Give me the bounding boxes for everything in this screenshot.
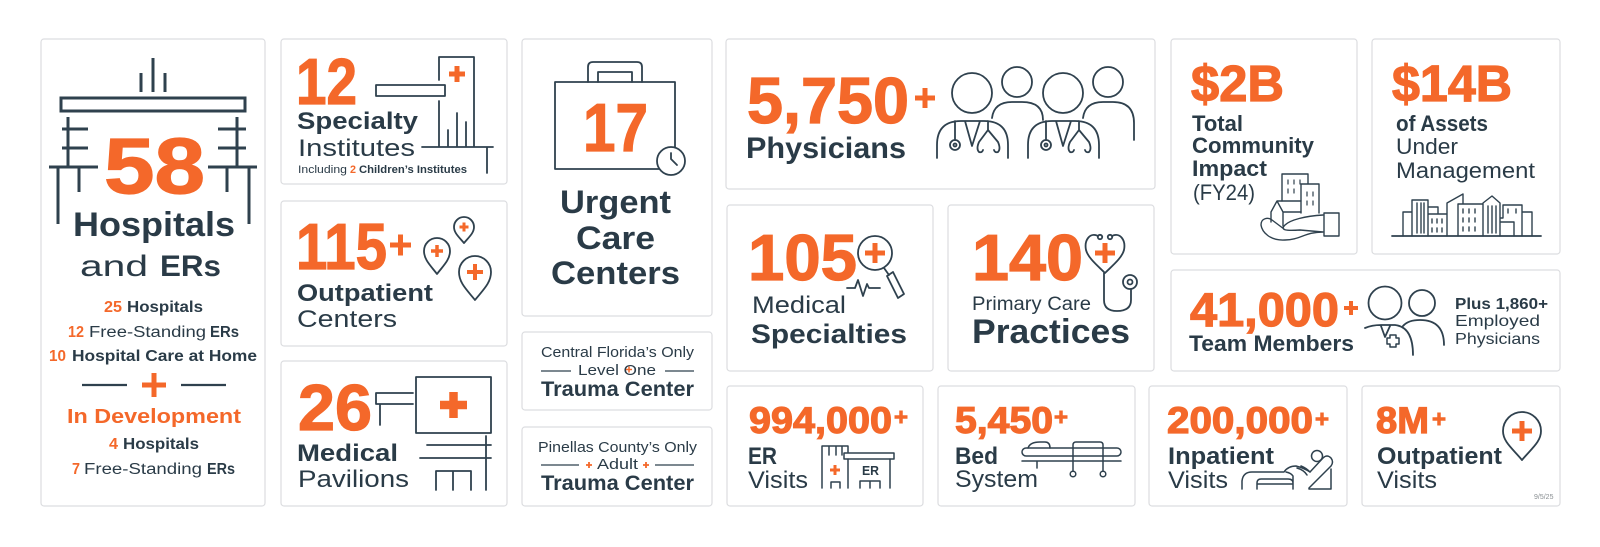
heading: and ERs: ERs <box>160 250 221 283</box>
label: care: Care <box>576 220 655 256</box>
icon: emergency room building: ER <box>862 463 880 478</box>
stat: 5,450+: 5,450 <box>955 400 1053 441</box>
label: team members: Team Members <box>1189 331 1354 356</box>
stat: 26: 26 <box>298 371 372 444</box>
text: 25 hospitals: 25 <box>104 299 122 316</box>
text: 7 free-standing ERs: 7 <box>72 461 80 478</box>
icon: institute building <box>376 57 493 173</box>
text: adult with rules: Adult <box>597 456 639 473</box>
text: including 2 children's institutes: 2 <box>350 164 356 176</box>
label: outpatient: Outpatient <box>297 280 433 307</box>
heading: in development: In Development <box>67 406 241 428</box>
panel: 41,000+ team members <box>1171 270 1560 371</box>
label: urgent: Urgent <box>560 184 671 220</box>
panel: 994,000+ ER visits <box>727 386 923 506</box>
label: outpatient: Outpatient <box>1377 443 1502 470</box>
text: plus 1,860+ employed physicians <box>1455 296 1548 348</box>
stat: 8M+: 8M <box>1376 400 1429 441</box>
stat: 58: 58 <box>104 121 205 210</box>
heading: and ERs: and <box>80 250 148 283</box>
label: under management: Under <box>1396 134 1458 159</box>
text: including 2 children's institutes: Children’s Institutes <box>359 164 467 176</box>
label: medical: Medical <box>752 292 846 319</box>
text: 12 free-standing ERs <box>68 324 239 341</box>
label: visits: Visits <box>1168 467 1228 494</box>
panel: 115+ outpatient centers <box>281 201 507 346</box>
text: central florida's only: Central Florida’s Only <box>541 344 695 361</box>
label: centers: Centers <box>297 306 397 333</box>
icon: emergency room building <box>822 446 894 488</box>
icon: briefcase with clock <box>555 62 685 175</box>
text: 4 hospitals: Hospitals <box>123 436 199 453</box>
panel: adult trauma center <box>522 427 712 506</box>
divider with plus <box>82 373 226 397</box>
panel: $2B community impact <box>1171 39 1357 254</box>
text: level one with rules <box>541 362 694 379</box>
label: system: System <box>955 466 1038 493</box>
text: plus 1,860+ employed physicians: Employed <box>1455 313 1540 330</box>
stat: 105: 105 <box>748 221 857 294</box>
panel: 140 primary care practices <box>948 205 1154 371</box>
stat: 5,750+: 5,750 <box>747 64 909 137</box>
panel: 105 medical specialties <box>727 205 933 371</box>
date stamp: 9/5/25 <box>1534 494 1554 501</box>
text: 7 free-standing ERs: Free-Standing <box>84 461 202 478</box>
text: 10 hospital care at home: 10 <box>49 348 66 365</box>
label: FY24: (FY24) <box>1193 180 1255 205</box>
panel: 5,450+ bed system <box>938 386 1135 506</box>
stat: 41,000+: 41,000 <box>1190 283 1339 336</box>
label: practices: Practices <box>972 313 1130 351</box>
panel: 17 urgent care centers <box>522 39 712 316</box>
text: 4 hospitals: 4 <box>109 436 118 453</box>
panel: 200,000+ inpatient visits <box>1149 386 1347 506</box>
stat: $14B: $14B <box>1392 55 1512 112</box>
icon: location pin <box>1503 412 1541 460</box>
label: total community impact: Total <box>1192 111 1243 136</box>
text: 7 free-standing ERs: ERs <box>207 461 235 478</box>
panel: $14B assets <box>1372 39 1560 254</box>
text: trauma center: Trauma Center <box>541 378 694 401</box>
icon: stethoscope heart <box>1086 235 1137 311</box>
panel: 58 hospitals and ERs <box>41 39 265 506</box>
label: of assets: of Assets <box>1396 111 1488 136</box>
icon: hospital outline <box>49 58 257 224</box>
text: 12 free-standing ERs: 12 <box>68 324 84 341</box>
label: total community impact: Impact <box>1192 156 1268 181</box>
icon: magnifier with pulse <box>847 236 904 298</box>
text: level one with rules: Level One <box>578 362 656 379</box>
panel: level one trauma center <box>522 332 712 410</box>
label: total community impact: Community <box>1192 133 1315 158</box>
text: 12 free-standing ERs: Free-Standing <box>89 324 206 341</box>
icon: physicians group <box>937 67 1134 158</box>
icon: patient in recliner <box>1242 450 1332 489</box>
icon: hand holding buildings <box>1261 174 1339 240</box>
icon: city skyline <box>1392 194 1541 236</box>
text: plus 1,860+ employed physicians: Physicians <box>1455 331 1540 348</box>
label: pavilions: Pavilions <box>298 466 409 493</box>
label: specialty: Specialty <box>297 108 419 135</box>
text: 10 hospital care at home: Hospital Care at Home <box>72 348 257 365</box>
icon: team members <box>1365 286 1444 355</box>
icon: pavilion building <box>376 377 491 490</box>
panel: 5,750+ physicians <box>726 39 1155 189</box>
stat: $2B: $2B <box>1191 55 1284 112</box>
stat: 140: 140 <box>972 221 1083 294</box>
text: trauma center: Trauma Center <box>541 472 694 495</box>
text: 7 free-standing ERs <box>72 461 235 478</box>
text: including 2 children's institutes <box>298 164 467 176</box>
heading: and ERs <box>80 250 221 283</box>
label: institutes: Institutes <box>298 135 415 162</box>
label: centers: Centers <box>551 255 680 291</box>
label: visits: Visits <box>1377 467 1437 494</box>
stat: 115+: 115 <box>296 210 387 283</box>
text: 25 hospitals: Hospitals <box>127 299 203 316</box>
panel: 26 medical pavilions <box>281 361 507 506</box>
label: under management: Management <box>1396 158 1535 183</box>
icon: hospital bed <box>1022 442 1121 477</box>
stat: 200,000+: 200,000 <box>1167 400 1313 441</box>
icon: location pins <box>424 217 491 300</box>
heading: Hospitals: Hospitals <box>73 206 235 244</box>
stat: 12: 12 <box>296 45 357 118</box>
label: physicians: Physicians <box>746 132 906 165</box>
text: 12 free-standing ERs: ERs <box>210 324 239 341</box>
stat: 17: 17 <box>583 90 648 166</box>
label: total community impact <box>1192 111 1315 181</box>
label: specialties: Specialties <box>751 319 907 349</box>
label: ER: ER <box>748 443 777 470</box>
label: bed: Bed <box>955 443 998 470</box>
label: visits: Visits <box>748 467 808 494</box>
panel: 12 specialty institutes <box>281 39 507 184</box>
text: adult with rules <box>541 456 694 473</box>
text: plus 1,860+ employed physicians: Plus 1,860+ <box>1455 296 1548 313</box>
label: under management <box>1396 134 1535 183</box>
label: medical: Medical <box>297 440 398 467</box>
panel: 8M+ outpatient visits <box>1362 386 1560 506</box>
text: pinellas county's only: Pinellas County’s Only <box>538 439 698 456</box>
stat: 994,000+: 994,000 <box>749 400 892 441</box>
label: primary care: Primary Care <box>972 294 1091 315</box>
text: including 2 children's institutes: Including <box>298 164 347 176</box>
label: inpatient: Inpatient <box>1168 443 1274 470</box>
